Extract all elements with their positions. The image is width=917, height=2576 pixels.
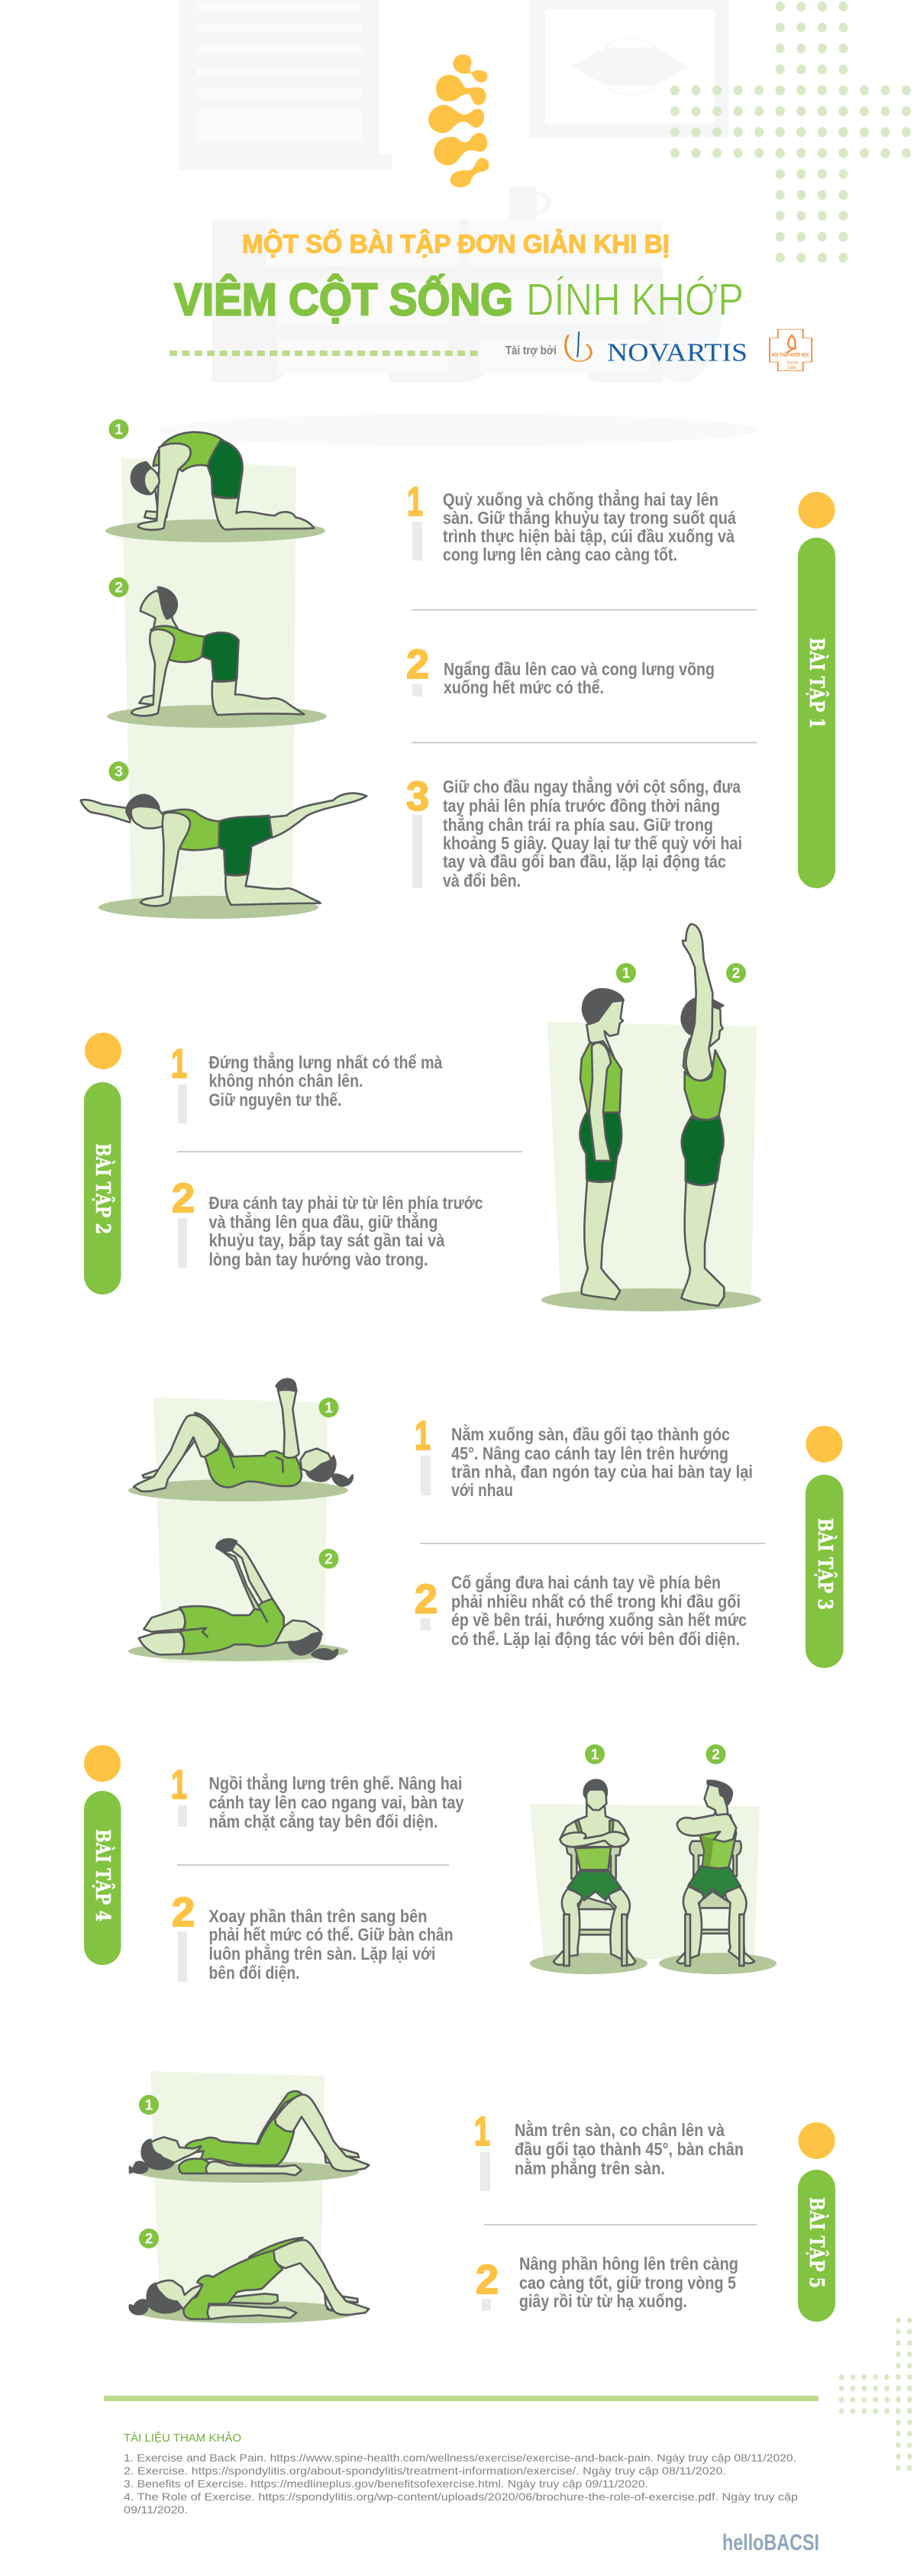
exercise 1 tab: [798, 492, 835, 888]
step 1: 45°. Nâng cao cánh tay lên trên hướng: [451, 1443, 728, 1463]
step 3: 3: [406, 774, 429, 819]
references heading: TÀI LIỆU THAM KHẢO: [124, 2432, 241, 2445]
panel: exercise 5 illustration: 2: [145, 2232, 153, 2247]
figure: back arched on hands and knees: [131, 432, 314, 530]
floor shadows: [128, 1479, 348, 1661]
step 1: với nhau: [451, 1480, 513, 1500]
step 2: 2: [415, 1576, 438, 1622]
logo: Novartis: [566, 331, 747, 367]
background floor ellipse: [159, 414, 759, 446]
step 1: 1: [171, 1762, 187, 1808]
step 2: Nâng phần hông lên trên càng: [519, 2254, 738, 2274]
background illustration: mug and desk: [211, 186, 725, 383]
exercise 4 tab: [84, 1745, 121, 1965]
step 3: Giữ cho đầu ngay thẳng với cột sống, đưa: [443, 775, 741, 797]
step 2: phải nhiều nhất có thể trong khi đầu gối: [451, 1592, 741, 1611]
step 2: Xoay phần thân trên sang bên: [209, 1906, 428, 1926]
figure: hips raised bridge: [130, 2238, 369, 2319]
panel: exercise 3 steps: [415, 1413, 765, 1649]
pale green backdrop: [150, 2071, 325, 2310]
step 1: Giữ nguyên tư thế.: [209, 1090, 342, 1110]
title: [174, 229, 744, 325]
decorative dot grid bottom right: [836, 2315, 915, 2474]
logo: orange cross: [770, 329, 812, 371]
floor shadow: [541, 1288, 761, 1311]
panel: exercise 2 illustration: 1: [622, 965, 631, 982]
step 1: nằm phẳng trên sàn.: [515, 2157, 665, 2178]
step 1: trần nhà, đan ngón tay của hai bàn tay lại: [451, 1462, 753, 1482]
logo: orange cross: 1980: [787, 366, 796, 370]
step 3: tay và đầu gối ban đầu, lặp lại động tác: [443, 852, 726, 871]
step badges: [585, 1744, 725, 1764]
step 1: Quỳ xuống và chống thẳng hai tay lên: [443, 488, 718, 509]
exercise 1 tab: BÀI TẬP 1: [805, 638, 829, 729]
step badges: [139, 2095, 159, 2248]
step 2: xuống hết mức có thể.: [444, 677, 604, 697]
pale green backdrop: [530, 1804, 760, 1959]
figure: head raised, back lowered: [131, 587, 304, 716]
pale green backdrop: [153, 1398, 328, 1663]
floor shadows: [98, 519, 327, 919]
step 1: 1: [407, 479, 423, 525]
panel: exercise 4 steps: [171, 1762, 464, 1983]
step badges: [616, 963, 746, 983]
panel: exercise 2 illustration: [541, 924, 761, 1311]
step 2: Đưa cánh tay phải từ từ lên phía trước: [209, 1193, 483, 1213]
figure: seated, torso rotated: [677, 1781, 754, 1966]
step 1: đầu gối tạo thành 45°, bàn chân: [515, 2139, 744, 2159]
step 2: 2: [406, 642, 429, 687]
step 3: và đổi bên.: [443, 871, 521, 890]
step 2: 2: [172, 1175, 195, 1221]
exercise 5 tab: [798, 2122, 835, 2322]
logo: Novartis: NOVARTIS: [607, 339, 747, 367]
step 1: Nằm trên sàn, co chân lên và: [515, 2119, 725, 2140]
footer divider bar: [104, 2396, 819, 2401]
step 2: [476, 2254, 738, 2311]
step 2: cao càng tốt, giữ trong vòng 5: [519, 2273, 736, 2293]
logo: orange cross: HỘI THẤP KHỚP HỌC: [772, 351, 809, 358]
panel: exercise 5 illustration: [130, 2071, 369, 2323]
sponsor label: Tài trợ bởi: [505, 344, 557, 357]
title: VIÊM CỘT SỐNG: [174, 273, 513, 325]
step 2: có thể. Lặp lại động tác với bên đối diện.: [451, 1629, 740, 1649]
references list: 2. Exercise. https://spondylitis.org/about-spondylitis/treatment-information/exercise/. Ngày truy cập 08/11/2020.: [124, 2464, 726, 2477]
step 2: [172, 1889, 454, 1983]
step 2: [415, 1572, 747, 1649]
step 2: và thẳng lên qua đầu, giữ thẳng: [209, 1210, 438, 1232]
step 1: sàn. Giữ thẳng khuỷu tay trong suốt quá: [443, 506, 737, 528]
figure: lying, arms up: [134, 1379, 353, 1492]
step 1: không nhón chân lên.: [209, 1071, 363, 1091]
panel: exercise 4 illustration: 1: [591, 1747, 599, 1763]
panel: exercise 4 illustration: 2: [712, 1747, 720, 1763]
step 2: [172, 1175, 483, 1269]
references list: 1. Exercise and Back Pain. https://www.spine-health.com/wellness/exercise/exercise-and-back-pain. Ngày truy cập 08/11/2020.: [124, 2452, 796, 2464]
exercise 2 tab: BÀI TẬP 2: [91, 1143, 115, 1234]
exercise 5 tab: BÀI TẬP 5: [805, 2197, 829, 2288]
step 2: Cố gắng đưa hai cánh tay về phía bên: [451, 1572, 721, 1592]
step 1: Nằm xuống sàn, đầu gối tạo thành góc: [451, 1424, 730, 1444]
step 2: ép về bên trái, hướng xuống sàn hết mức: [451, 1610, 747, 1630]
panel: exercise 3 illustration: 2: [325, 1552, 333, 1567]
step 1: [474, 2109, 744, 2191]
step 1: [171, 1762, 464, 1831]
step 2: phải hết mức có thể. Giữ bàn chân: [209, 1925, 454, 1944]
step 1: Đứng thẳng lưng nhất có thể mà: [209, 1051, 443, 1072]
floor shadows: [137, 2161, 359, 2323]
pale green backdrop: [121, 458, 296, 906]
step 1: cánh tay lên cao ngang vai, bàn tay: [209, 1792, 464, 1812]
references list: 09/11/2020.: [124, 2503, 188, 2516]
logo: orange cross: TP.HCM: [786, 361, 798, 366]
exercise 3 tab: [806, 1426, 843, 1668]
step 2: luôn phẳng trên sàn. Lặp lại với: [209, 1942, 435, 1964]
panel: exercise 5 steps: [474, 2109, 757, 2311]
step 1: 1: [415, 1413, 431, 1459]
step 1: 1: [171, 1041, 187, 1087]
pale green backdrop: [547, 1022, 757, 1295]
step 1: cong lưng lên càng cao càng tốt.: [443, 545, 677, 564]
panel: exercise 1 illustration: 2: [115, 580, 123, 596]
references list: [124, 2452, 798, 2516]
figure: seated facing front: [554, 1780, 635, 1966]
panel: exercise 2 illustration: 2: [732, 965, 740, 982]
figure: standing, arm raised: [681, 924, 725, 1306]
logo: helloBACSI: helloBACSI: [722, 2530, 819, 2555]
step 2: bên đối diện.: [209, 1963, 299, 1983]
step 1: trình thực hiện bài tập, cúi đầu xuống và: [443, 526, 735, 546]
panel: exercise 1 steps: [406, 479, 757, 890]
panel: exercise 1 illustration: [81, 419, 366, 919]
panel: exercise 2 steps: [171, 1041, 522, 1269]
exercise 4 tab: BÀI TẬP 4: [91, 1829, 115, 1921]
step 2: Ngẩng đầu lên cao và cong lưng võng: [444, 659, 715, 679]
decorative dot grid top right: [664, 0, 917, 268]
step 1: nắm chặt cẳng tay bên đối diện.: [209, 1810, 438, 1831]
exercise 2 tab: [84, 1033, 121, 1294]
dashed divider: [170, 351, 479, 356]
step 3: khoảng 5 giây. Quay lại tư thế quỳ với hai: [443, 833, 742, 853]
step 2: 2: [172, 1889, 195, 1935]
exercise 3 tab: BÀI TẬP 3: [813, 1518, 838, 1610]
panel: exercise 1 illustration: 1: [115, 422, 123, 438]
step 1: [171, 1041, 443, 1123]
panel: exercise 5 illustration: 1: [145, 2097, 153, 2114]
panel: exercise 3 illustration: [128, 1379, 353, 1663]
background illustration: picture frame: [529, 0, 728, 137]
step 3: [406, 774, 742, 890]
figure: lying, knees bent: [130, 2091, 369, 2175]
step 2: 2: [476, 2257, 499, 2303]
step badges: [319, 1398, 339, 1569]
step 2: [406, 642, 715, 697]
step 3: thẳng chân trái ra phía sau. Giữ trong: [443, 813, 713, 835]
step 1: Ngồi thẳng lưng trên ghế. Nâng hai: [209, 1772, 463, 1793]
step 2: khuỷu tay, bắp tay sát gần tai và: [209, 1230, 445, 1250]
title: MỘT SỐ BÀI TẬP ĐƠN GIẢN KHI BỊ: [242, 229, 670, 259]
panel: exercise 1 illustration: 3: [115, 764, 123, 781]
figure: lying, knees to side: [139, 1539, 337, 1660]
icon: yellow spine: [428, 54, 489, 187]
step 1: [415, 1413, 753, 1500]
references list: 3. Benefits of Exercise. https://medlineplus.gov/benefitsofexercise.html. Ngày truy cập 09/11/2020.: [124, 2477, 648, 2490]
title: DÍNH KHỚP: [526, 275, 744, 325]
background illustration: bookshelf: [179, 0, 392, 170]
step 2: giây rồi từ từ hạ xuống.: [519, 2291, 687, 2311]
step 2: lòng bàn tay hướng vào trong.: [209, 1249, 428, 1269]
figure: standing, arm down: [580, 989, 624, 1300]
step badges: [108, 419, 128, 781]
floor shadows: [530, 1953, 777, 1974]
references list: 4. The Role of Exercise. https://spondylitis.org/wp-content/uploads/2020/06/brochure-the-role-of-exercise.pdf. Ngày truy cập: [124, 2490, 798, 2503]
step 1: 1: [474, 2109, 490, 2154]
step 3: tay phải lên phía trước đồng thời nâng: [443, 796, 720, 816]
step 1: [407, 479, 737, 564]
panel: exercise 3 illustration: 1: [325, 1401, 333, 1416]
figure: arm and opposite leg extended: [81, 793, 366, 906]
panel: exercise 4 illustration: [530, 1744, 777, 1974]
